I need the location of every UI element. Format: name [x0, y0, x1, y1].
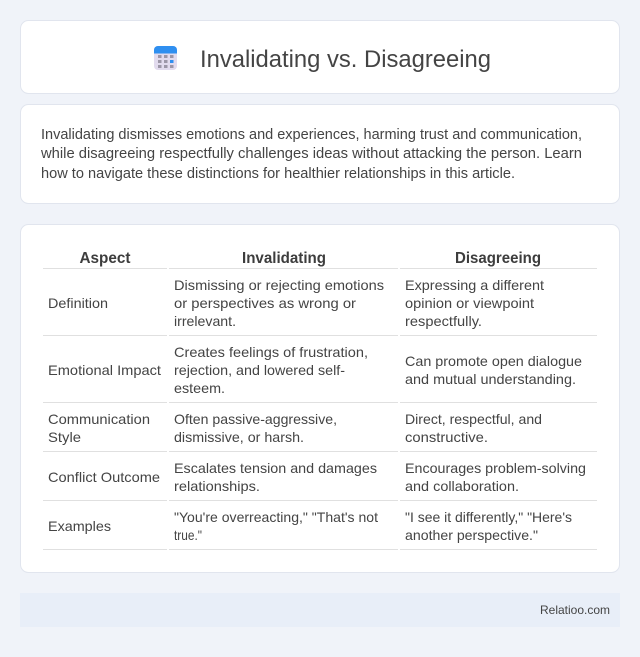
table header: Invalidating — [242, 250, 326, 267]
icon: calendar — [154, 46, 177, 70]
footer: Relatioo.com — [540, 603, 610, 617]
row: communication style: constructive. — [405, 429, 488, 445]
row: emotional impact — [48, 344, 582, 396]
text: intro paragraph — [40, 127, 582, 182]
panel: intro — [20, 104, 620, 204]
row: definition: or perspectives as wrong or — [174, 295, 356, 311]
table header — [80, 250, 541, 267]
panel: title card — [20, 20, 620, 94]
row: examples: another perspective." — [405, 527, 538, 543]
text: intro paragraph: while disagreeing respectfully challenges ideas without attacking the person. Learn — [40, 146, 582, 162]
row: definition — [48, 277, 544, 329]
row: communication style: Direct, respectful, and — [405, 411, 542, 427]
row: examples: true." — [174, 527, 202, 543]
row: examples: "I see it differently," "Here's — [405, 509, 572, 525]
row: conflict outcome: Escalates tension and damages — [174, 460, 377, 476]
title: Invalidating vs. Disagreeing — [200, 46, 491, 73]
row: definition: opinion or viewpoint — [405, 295, 534, 311]
text: intro paragraph: how to navigate these distinctions for healthier relationships in this article. — [41, 166, 515, 182]
row: conflict outcome — [48, 460, 586, 494]
panel: comparison table — [20, 224, 620, 572]
row: conflict outcome: Encourages problem-solving — [405, 460, 586, 476]
row: examples: "You're overreacting," "That's not — [174, 509, 378, 525]
row: definition: Expressing a different — [405, 277, 544, 293]
row: conflict outcome: relationships. — [174, 478, 260, 494]
row: communication style — [48, 411, 542, 445]
row: communication style: Often passive-aggressive, — [174, 411, 337, 427]
row: communication style: Communication — [48, 411, 150, 427]
row: examples — [48, 509, 572, 543]
row: emotional impact: Emotional Impact — [48, 362, 161, 378]
row: definition: respectfully. — [405, 313, 482, 329]
row: emotional impact: and mutual understanding. — [405, 371, 576, 387]
row: conflict outcome: and collaboration. — [405, 478, 519, 494]
row: definition: irrelevant. — [174, 313, 236, 329]
row: emotional impact: esteem. — [174, 380, 225, 396]
row: communication style: dismissive, or harsh. — [174, 429, 304, 445]
table header: Disagreeing — [455, 250, 541, 267]
row: examples: Examples — [48, 518, 111, 534]
row: conflict outcome: Conflict Outcome — [48, 469, 160, 485]
row: definition: Dismissing or rejecting emotions — [174, 277, 384, 293]
table header: Aspect — [80, 250, 131, 267]
row: emotional impact: Can promote open dialogue — [405, 353, 582, 369]
text: intro paragraph: Invalidating dismisses emotions and experiences, harming trust and communication, — [41, 127, 582, 143]
footer — [20, 593, 620, 627]
row: communication style: Style — [48, 429, 81, 445]
row: definition: Definition — [48, 295, 108, 311]
row: emotional impact: Creates feelings of frustration, — [174, 344, 368, 360]
row: emotional impact: rejection, and lowered self- — [174, 362, 345, 378]
